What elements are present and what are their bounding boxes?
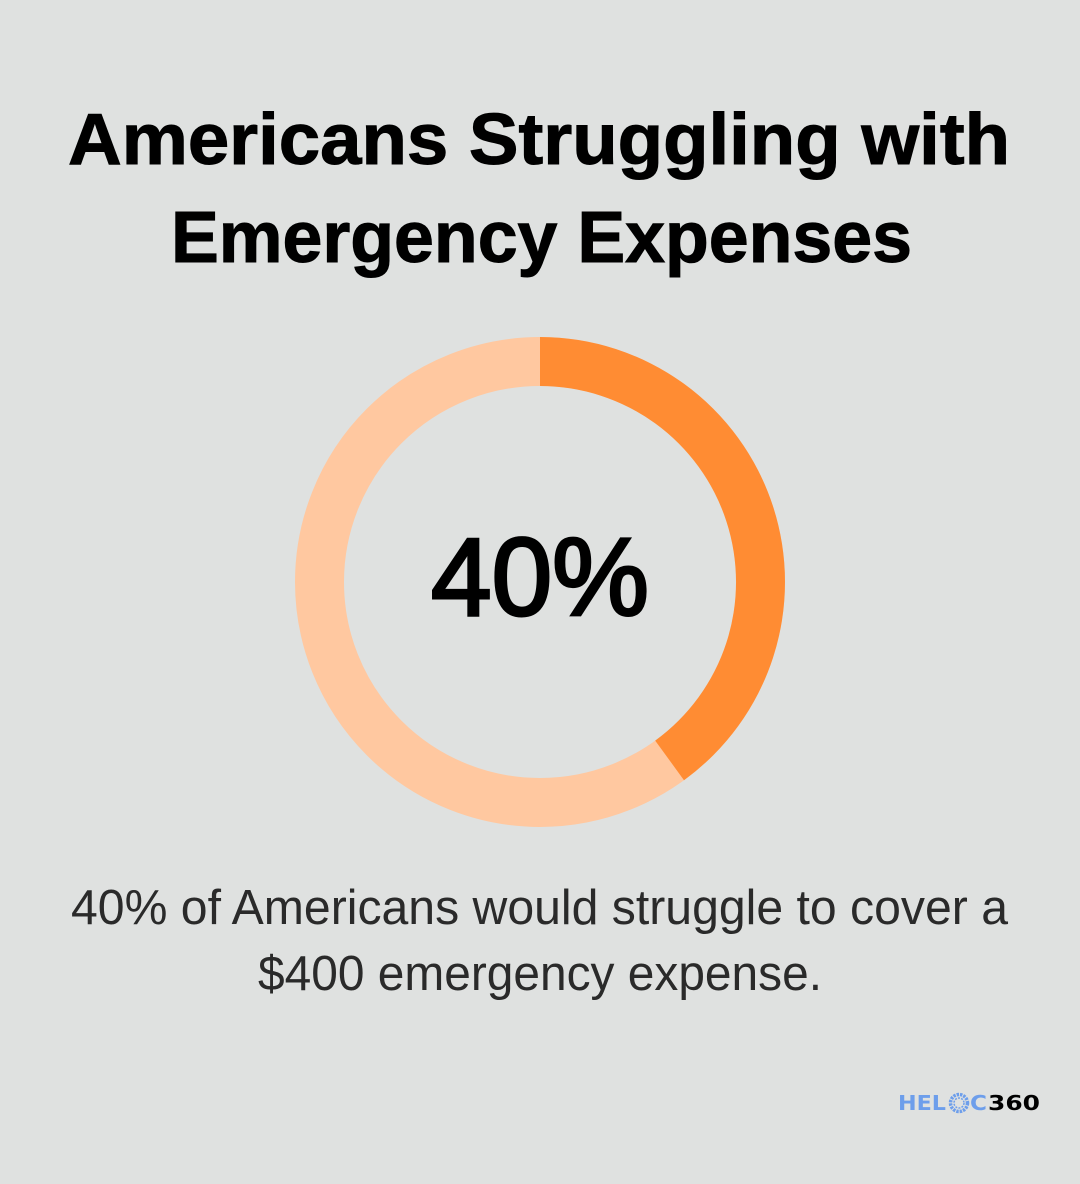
description text: $400 emergency expense. <box>258 947 822 1001</box>
logo text: C: C <box>970 1091 987 1115</box>
logo text: HEL: HEL <box>898 1091 946 1115</box>
logo: HELOC360 <box>898 1091 1040 1115</box>
donut track: remaining 60 percent <box>320 362 760 802</box>
center value: 40% <box>431 516 649 639</box>
donut segment: 40 percent <box>540 337 785 780</box>
title: Americans Struggling with <box>68 100 1010 180</box>
logo text: 360: 360 <box>988 1091 1040 1115</box>
icon: swirl O <box>950 1094 968 1112</box>
description text <box>71 881 1009 1001</box>
title: Emergency Expenses <box>171 198 912 278</box>
description text: 40% of Americans would struggle to cover a <box>71 881 1009 935</box>
donut chart: 40 percent <box>320 337 785 802</box>
title <box>68 100 1010 278</box>
